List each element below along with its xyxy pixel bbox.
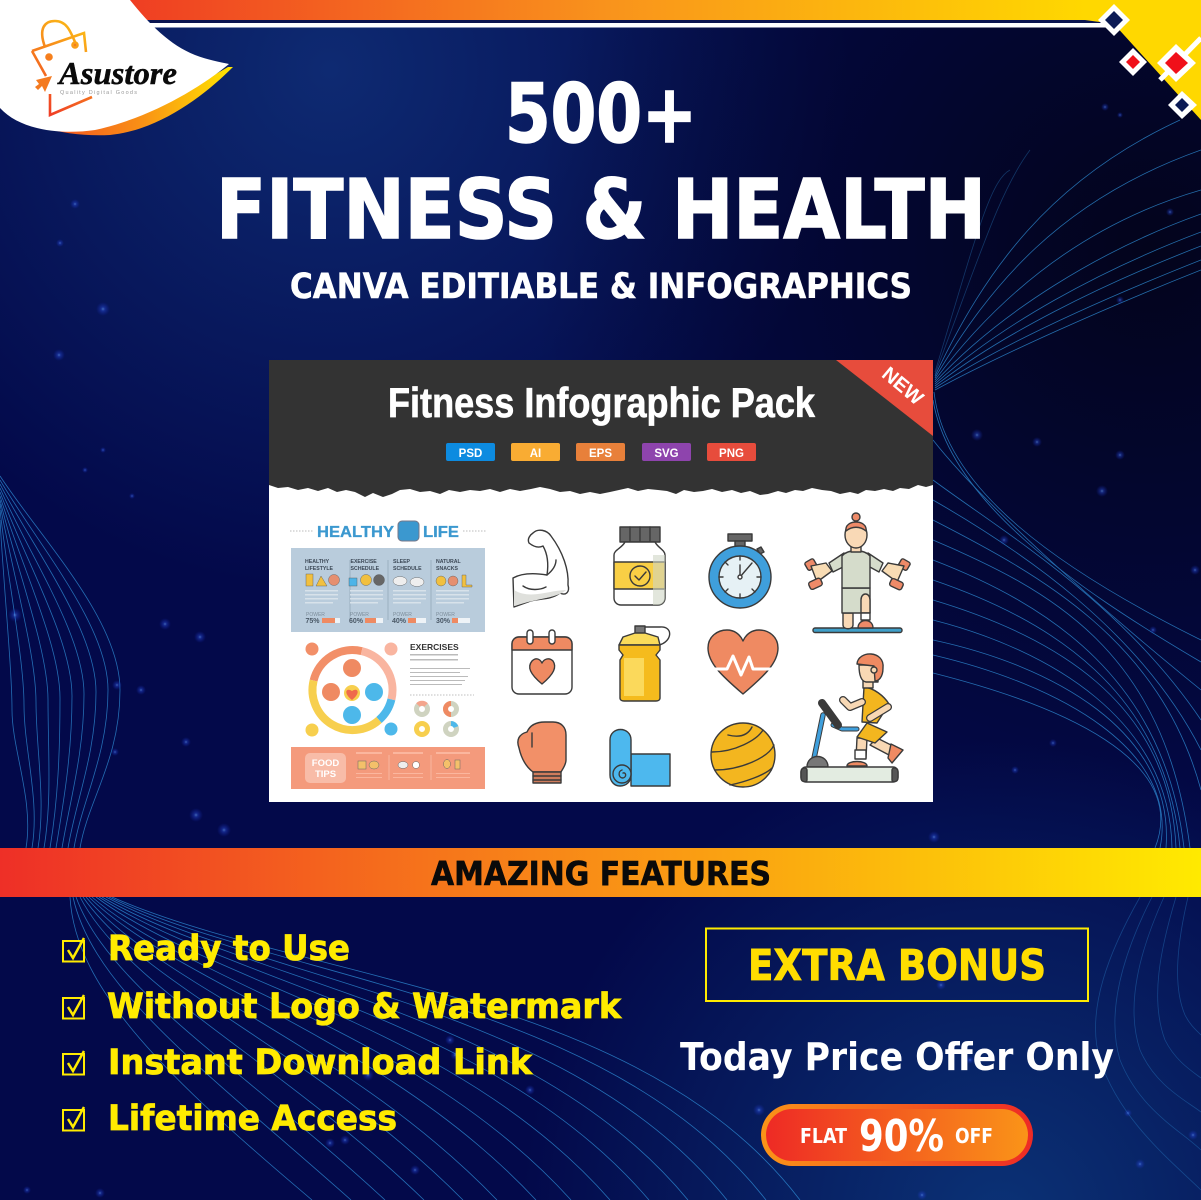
healthy life table: 75%	[306, 618, 320, 625]
logo wordmark: Asustore	[57, 55, 177, 91]
new ribbon: NEW	[877, 363, 927, 410]
feature: without logo and watermark: Without Logo & Watermark	[107, 987, 622, 1027]
top gradient bar	[130, 0, 1115, 28]
exercises donut chart	[306, 642, 398, 736]
icon: exercise ball	[711, 723, 775, 787]
new ribbon	[836, 360, 933, 436]
features band	[0, 848, 1201, 897]
discount pill: 90%	[859, 1111, 944, 1162]
format chips	[446, 443, 756, 461]
feature: ready to use: Ready to Use	[108, 929, 350, 969]
logo tagline: Quality Digital Goods	[60, 90, 137, 96]
exercises text block: EXERCISES	[410, 642, 459, 652]
panel: product preview	[269, 360, 933, 802]
icon: heart with pulse	[708, 630, 778, 694]
discount pill: OFF	[955, 1124, 993, 1148]
icon: stopwatch	[709, 534, 771, 608]
discount pill: FLAT	[800, 1124, 847, 1148]
healthy life table: SCHEDULE	[350, 566, 380, 572]
subtitle: CANVA EDITIABLE & INFOGRAPHICS	[290, 267, 912, 307]
logo badge	[0, 0, 233, 135]
today price text: Today Price Offer Only	[680, 1035, 1114, 1079]
feature: lifetime access: Lifetime Access	[108, 1099, 397, 1139]
healthy life heading: LIFE	[423, 524, 459, 541]
healthy life heading	[290, 521, 486, 541]
format chips: AI	[530, 448, 541, 460]
icon: heart calendar	[512, 630, 572, 694]
feature: instant download link: Instant Download Link	[108, 1043, 533, 1083]
healthy life table: SNACKS	[436, 566, 458, 572]
preview title: Fitness Infographic Pack	[388, 379, 816, 426]
healthy life table: SLEEP	[393, 559, 411, 565]
healthy life table: EXERCISE	[350, 559, 377, 565]
healthy life table: POWER	[436, 612, 455, 618]
food tips banner: TIPS	[315, 769, 336, 780]
logo bag icon	[32, 21, 92, 115]
format chips: EPS	[589, 448, 612, 460]
icon: supplement jar	[614, 527, 665, 605]
icon: water bottle	[619, 626, 670, 701]
healthy life table: SCHEDULE	[393, 566, 422, 572]
exercises text block	[410, 642, 474, 734]
healthy life table: LIFESTYLE	[305, 566, 333, 572]
healthy life table: 30%	[436, 618, 451, 625]
healthy life table: HEALTHY	[305, 559, 330, 565]
food tips banner	[291, 747, 485, 789]
icon: flexed bicep	[513, 530, 569, 607]
extra bonus box: EXTRA BONUS	[748, 941, 1046, 991]
format chips: PSD	[459, 448, 482, 460]
icon: yoga mat	[610, 730, 670, 786]
healthy life table: 40%	[392, 618, 407, 625]
preview dark header with torn edge	[269, 360, 933, 497]
healthy life table	[291, 548, 485, 632]
format chips: PNG	[719, 448, 744, 460]
title: fitness and health: FITNESS & HEALTH	[216, 163, 986, 258]
yellow corner with diamonds	[1085, 0, 1201, 120]
icon: woman with dumbbells	[804, 513, 911, 632]
feature list	[63, 929, 622, 1139]
icon: boxing glove	[518, 722, 566, 783]
extra bonus box	[706, 928, 1088, 1001]
healthy life table: POWER	[393, 612, 412, 618]
icon: runner on treadmill	[801, 654, 903, 782]
healthy life table: POWER	[306, 612, 325, 618]
healthy life table: 60%	[349, 618, 364, 625]
healthy life table: NATURAL	[436, 559, 462, 565]
title: 500+: 500+	[505, 68, 697, 162]
healthy life heading: HEALTHY	[317, 524, 394, 541]
discount pill	[761, 1104, 1033, 1166]
healthy life table: POWER	[350, 612, 369, 618]
features heading: AMAZING FEATURES	[431, 854, 771, 893]
food tips banner: FOOD	[312, 758, 339, 769]
format chips: SVG	[654, 448, 679, 460]
